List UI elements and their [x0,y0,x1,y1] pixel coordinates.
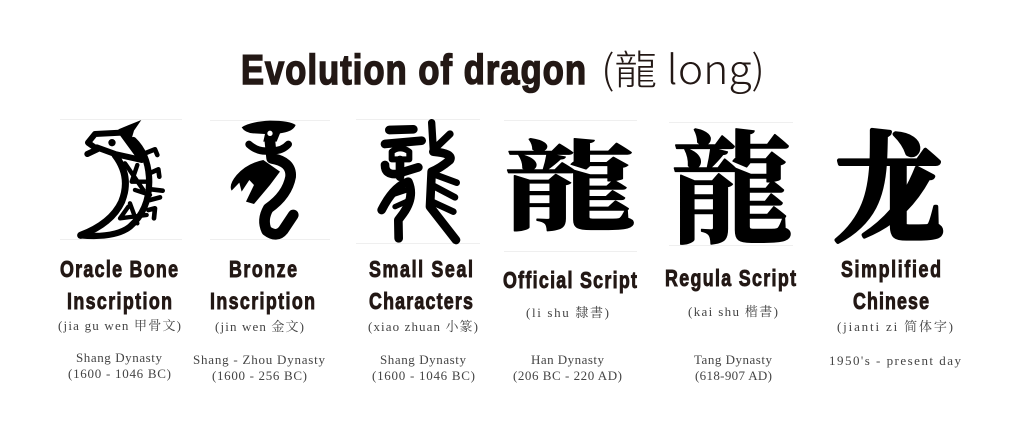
heading: bronze: Inscription [210,289,315,315]
panel: oracle bone inscription [58,120,181,381]
dates: han dynasty: (206 BC - 220 AD) [513,368,622,383]
dates: shang dynasty: (1600 - 1046 BC) [372,368,475,383]
dates: han dynasty: Han Dynasty [531,352,604,367]
heading: small seal: Small Seal [369,257,473,283]
dates: shang-zhou: (1600 - 256 BC) [212,368,307,383]
pinyin: li shu: (li shu 隸書) [526,305,609,320]
icon: bronze dragon glyph [231,121,296,234]
heading: oracle bone: Inscription [67,289,172,315]
dates: 1950s to present: 1950's - present day [829,353,962,368]
panel: regula script [665,93,796,383]
dates: shang dynasty: Shang Dynasty [380,352,466,367]
pinyin: jianti zi: (jianti zi 简体字) [837,319,953,334]
heading: simplified chinese [841,257,941,315]
panel: bronze inscription [193,121,326,383]
heading: official script: Official Script [503,268,637,294]
icon: oracle bone dragon glyph [81,120,163,236]
pinyin: jin wen: (jin wen 金文) [215,319,304,334]
panel: simplified chinese [829,94,962,368]
heading: bronze: Bronze [229,257,297,283]
glyph: simplified dragon: 龙 [834,94,944,265]
dates: han dynasty [513,352,622,383]
heading: small seal [369,257,473,315]
pinyin: xiao zhuan: (xiao zhuan 小篆) [368,319,478,334]
icon: small seal dragon glyph [382,123,457,240]
dates: shang dynasty [68,350,171,381]
heading: oracle bone [60,257,178,315]
panel: official script [503,110,637,383]
dates: shang-zhou [193,352,326,383]
heading: simplified chinese: Simplified [841,257,941,283]
dates: shang dynasty: (1600 - 1046 BC) [68,366,171,381]
title: Evolution of dragon [241,47,586,94]
heading: simplified chinese: Chinese [853,289,929,315]
pinyin: kai shu: (kai shu 楷書) [688,304,778,319]
heading: small seal: Characters [369,289,473,315]
dates: shang dynasty [372,352,475,383]
panel: small seal characters [368,123,478,383]
title: (龍 long) [601,38,765,96]
glyph: regular script dragon: 龍 [671,93,793,268]
pinyin: jia gu wen: (jia gu wen 甲骨文) [58,318,181,333]
glyph: official script dragon: 龍 [504,110,636,251]
dates: tang dynasty: (618-907 AD) [695,368,772,383]
dates: shang-zhou: Shang - Zhou Dynasty [193,352,326,367]
heading: oracle bone: Oracle Bone [60,257,178,283]
title [241,38,765,96]
dates: shang dynasty: Shang Dynasty [76,350,162,365]
dates: tang dynasty: Tang Dynasty [694,352,772,367]
heading: bronze [210,257,315,315]
dates: tang dynasty [694,352,772,383]
heading: regula script: Regula Script [665,266,796,292]
